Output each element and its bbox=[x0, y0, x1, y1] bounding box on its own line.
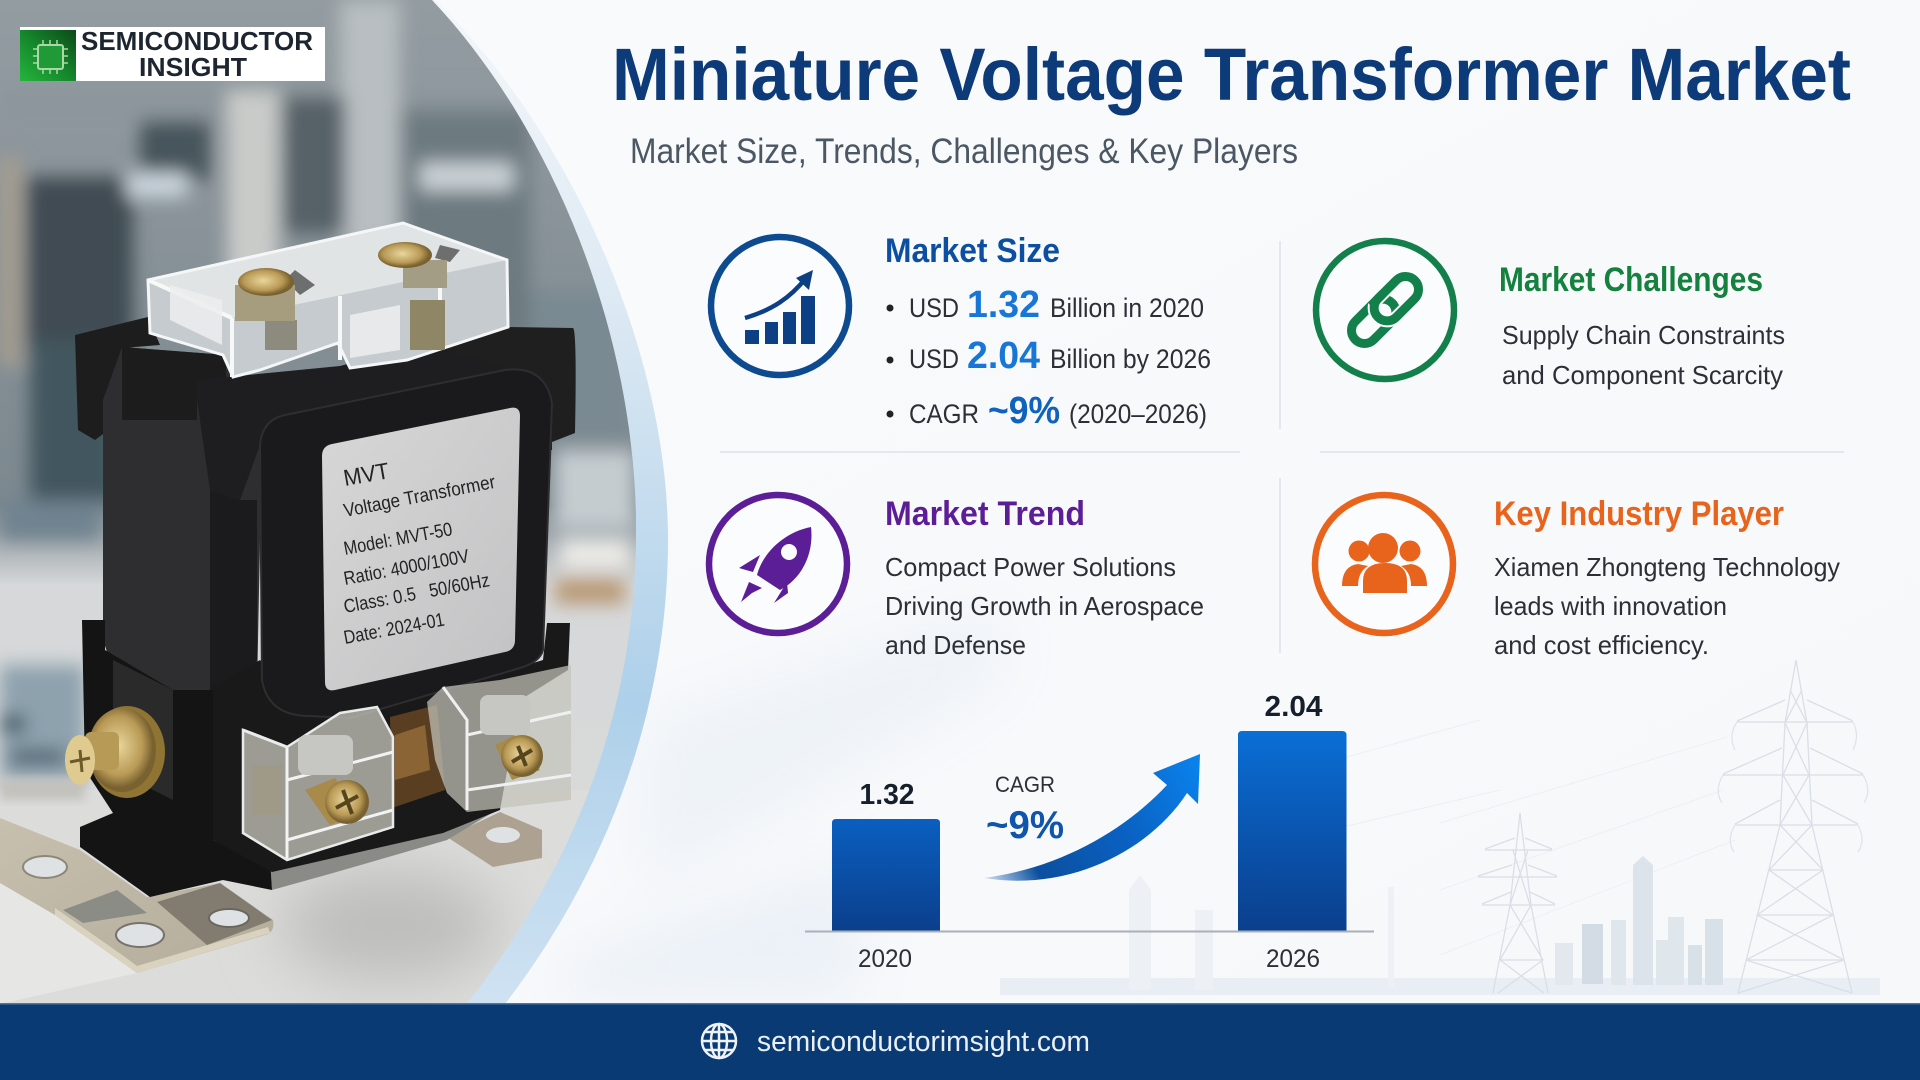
nameplate text: Ratio: 4000/100V bbox=[342, 546, 471, 590]
terminal cover right bbox=[427, 665, 571, 812]
icon: people group bbox=[1315, 495, 1453, 633]
bar: 2020: 2020 bbox=[858, 945, 912, 973]
body text bbox=[885, 552, 1204, 660]
footer website: semiconductorimsight.com bbox=[757, 1026, 1090, 1058]
logo chip icon bbox=[20, 30, 76, 81]
nameplate text: Date: 2024-01 bbox=[342, 610, 446, 649]
panel: market challenges bbox=[1316, 241, 1785, 390]
panel: market trend bbox=[709, 495, 1204, 660]
front face bbox=[260, 369, 552, 718]
table surface bbox=[0, 780, 640, 1010]
curved accent band bbox=[432, 0, 668, 1004]
nameplate text: MVT bbox=[341, 457, 391, 491]
title: Miniature Voltage Transformer Market bbox=[612, 33, 1851, 116]
heading: Market Trend bbox=[885, 495, 1085, 533]
subtitle: Market Size, Trends, Challenges & Key Players bbox=[630, 132, 1298, 171]
stat: 2026 size: USD bbox=[909, 344, 959, 374]
stat: 2020 size: USD bbox=[909, 293, 959, 323]
bar: 2026 bbox=[1238, 691, 1346, 973]
heading: Market Challenges bbox=[1499, 261, 1763, 299]
bar: 2020 bbox=[832, 779, 940, 973]
CAGR label: CAGR bbox=[995, 772, 1055, 797]
body text: Compact Power Solutions bbox=[885, 552, 1176, 582]
icon: growth chart bbox=[711, 237, 849, 375]
body text bbox=[1502, 320, 1785, 390]
stat: 2026 size bbox=[886, 335, 1211, 377]
body text bbox=[1494, 552, 1840, 660]
logo bbox=[20, 26, 325, 82]
lower terminals bbox=[65, 665, 571, 860]
transformer body bbox=[75, 317, 576, 897]
nameplate text: Voltage Transformer bbox=[342, 472, 498, 522]
skyline and pylons watermark bbox=[1000, 660, 1880, 995]
small pylon bbox=[1478, 813, 1557, 993]
bar: 2026: 2026 bbox=[1266, 945, 1320, 973]
CAGR label: ~9% bbox=[986, 804, 1064, 847]
body text: Supply Chain Constraints bbox=[1502, 320, 1785, 350]
icon: globe bbox=[702, 1024, 736, 1058]
blurred factory background bbox=[0, 0, 635, 780]
panel: market size bbox=[711, 232, 1211, 432]
panel: key industry player bbox=[1315, 495, 1840, 660]
logo text: SEMICONDUCTOR bbox=[81, 26, 313, 56]
bar chart bbox=[805, 691, 1374, 973]
body text: and Defense bbox=[885, 630, 1026, 660]
stat: 2020 size: Billion in 2020 bbox=[1050, 293, 1204, 323]
logo: INSIGHT bbox=[139, 52, 247, 82]
nameplate text: Class: 0.5 50/60Hz bbox=[342, 570, 491, 618]
body text: Driving Growth in Aerospace bbox=[885, 591, 1204, 621]
body text: Xiamen Zhongteng Technology bbox=[1494, 552, 1840, 582]
body text: and cost efficiency. bbox=[1494, 630, 1709, 660]
stat: 2026 size: Billion by 2026 bbox=[1050, 344, 1211, 374]
stat: 2020 size: 1.32 bbox=[967, 284, 1040, 326]
stat: 2026 size: 2.04 bbox=[967, 335, 1040, 377]
nameplate text: Model: MVT-50 bbox=[342, 519, 454, 560]
arrow: growth bbox=[984, 754, 1200, 881]
bar: 2026: 2.04 bbox=[1264, 691, 1322, 723]
clear terminal cover, top bbox=[148, 223, 508, 377]
power lines bbox=[1300, 720, 1735, 955]
footer bar bbox=[0, 1003, 1920, 1080]
stat: CAGR bbox=[886, 390, 1207, 432]
panel: product photo bbox=[0, 0, 700, 1010]
nameplate bbox=[322, 408, 520, 690]
heading: Market Size bbox=[885, 232, 1060, 270]
nameplate text bbox=[341, 457, 498, 649]
metal mounting plate bbox=[0, 808, 542, 973]
bar: 2020: 1.32 bbox=[860, 779, 914, 811]
CAGR label bbox=[986, 772, 1064, 847]
stat: CAGR: ~9% bbox=[988, 390, 1060, 432]
stat: CAGR: (2020–2026) bbox=[1069, 399, 1207, 429]
stat: 2020 size bbox=[886, 284, 1204, 326]
brass bolt bbox=[65, 706, 165, 798]
heading: Key Industry Player bbox=[1494, 495, 1784, 533]
stat: CAGR: CAGR bbox=[909, 399, 979, 429]
large pylon bbox=[1718, 660, 1868, 993]
terminal cover left bbox=[243, 707, 393, 860]
icon: chain link bbox=[1316, 241, 1454, 379]
body text: leads with innovation bbox=[1494, 591, 1727, 621]
body text: and Component Scarcity bbox=[1502, 360, 1783, 390]
icon: rocket bbox=[709, 495, 847, 633]
city buildings bbox=[1000, 856, 1880, 995]
